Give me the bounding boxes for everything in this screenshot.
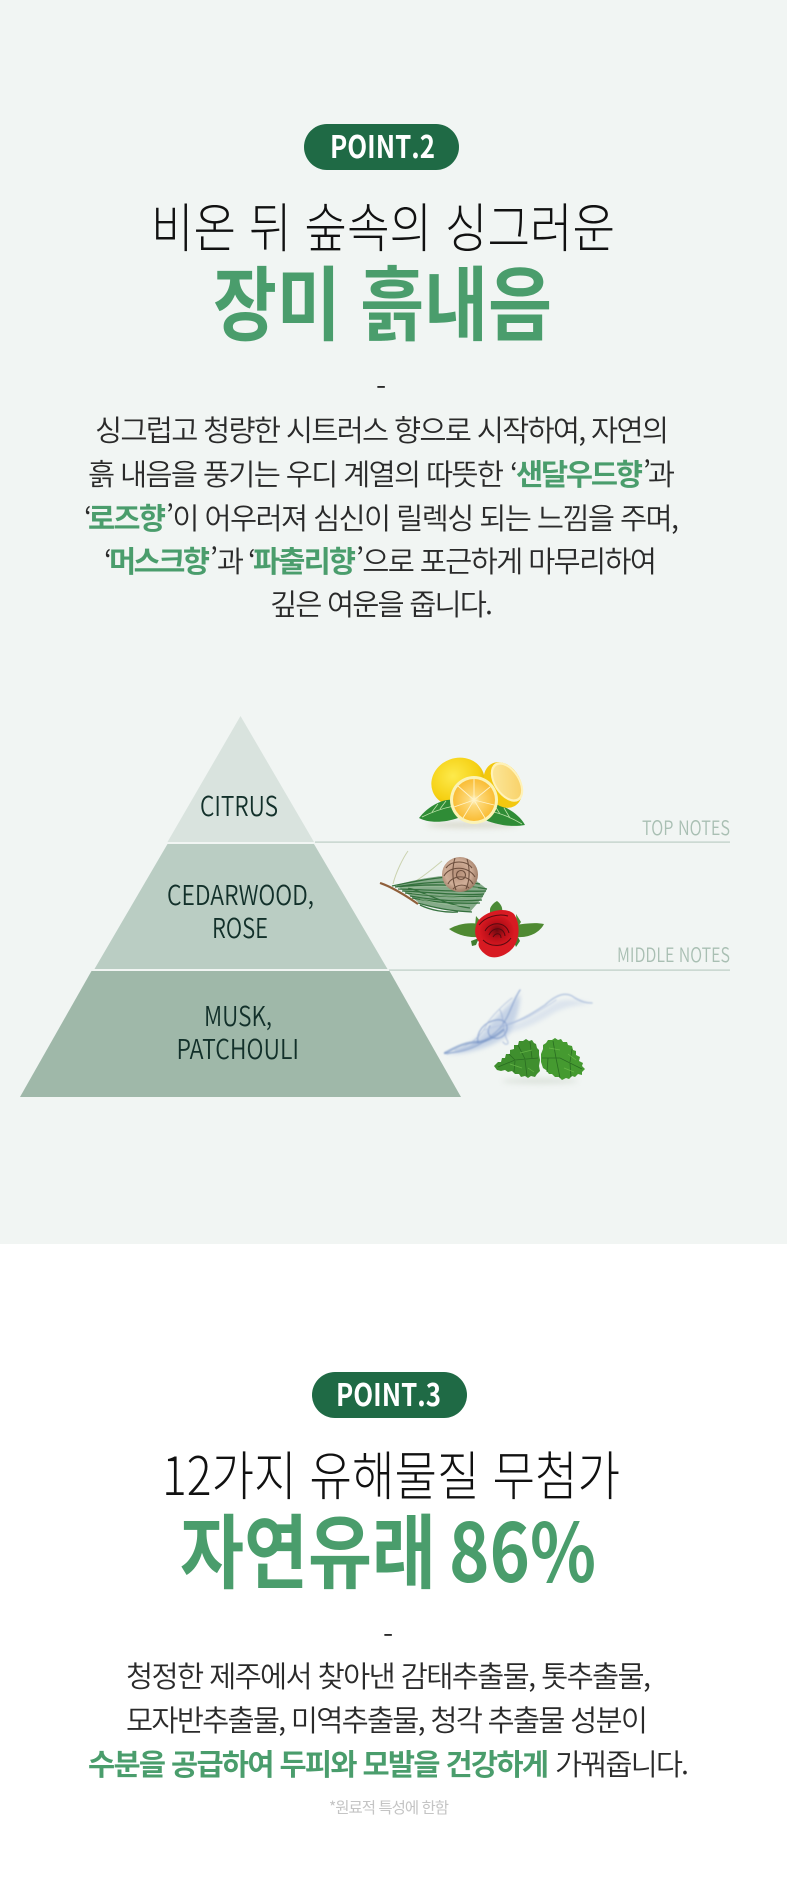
text block: point 3 description: 모자반추출물, 미역추출물, 청각 추출물 성분이 [126, 1698, 648, 1740]
pyramid tier: citrus: CITRUS [200, 785, 278, 824]
heading: point 3 title: 자연유래 [180, 1489, 436, 1606]
label: top notes with rule: TOP NOTES [642, 812, 730, 841]
text block: point 2 description: ‘ [84, 496, 92, 538]
text block: point 2 description: ‘ [104, 539, 112, 581]
pyramid tier: musk, patchouli: PATCHOULI [176, 1028, 299, 1067]
text block: point 2 description: 싱그럽고 청량한 시트러스 향으로 시작하여, 자연의 [95, 408, 669, 450]
panel: point 2 background [0, 0, 787, 1244]
icon: lemons and leaves [419, 750, 530, 828]
heading: point 3 subtitle: 12가지 유해물질 무첨가 [162, 1435, 620, 1511]
text block: point 2 description: ‘ [248, 539, 256, 581]
heading: point 3 title: 86% [449, 1489, 596, 1606]
text block: point 2 description: 파출리향 [253, 539, 356, 581]
badge: POINT.3: POINT.3 [336, 1370, 441, 1415]
footnote: *원료적 특성에 한함 [329, 1796, 449, 1818]
icon: patchouli leaves [494, 1038, 585, 1084]
text block: point 2 description: ‘ [510, 452, 518, 494]
text block: point 2 description [84, 408, 679, 624]
text block: point 2 description: ’으로 포근하게 마무리하여 [356, 539, 657, 581]
pyramid tier: musk, patchouli [20, 971, 461, 1097]
text: point 3 dash: - [383, 1613, 393, 1655]
chart: fragrance note pyramid [20, 716, 461, 1097]
icon: musk smoke [445, 990, 592, 1054]
text block: point 3 description: 수분을 공급하여 두피와 모발을 건강하게 [88, 1742, 549, 1784]
icon: cedar branch and cone [380, 851, 487, 912]
pyramid tier: musk, patchouli: MUSK, [204, 995, 272, 1034]
heading: point 2 subtitle: 비온 뒤 숲속의 싱그러운 [151, 187, 615, 263]
pyramid tier: cedarwood, rose: ROSE [212, 907, 268, 946]
text block: point 3 description [88, 1654, 689, 1784]
text block: point 2 description: 깊은 여운을 줍니다. [270, 582, 493, 624]
text block: point 3 description: 가꿔줍니다. [555, 1742, 689, 1784]
text block: point 3 description: 청정한 제주에서 찾아낸 감태추출물, 톳추출물, [126, 1654, 651, 1696]
label: middle notes with rule: MIDDLE NOTES [617, 939, 730, 968]
pyramid tier: cedarwood, rose: CEDARWOOD, [167, 874, 314, 913]
heading: point 2 title: 장미 흙내음 [213, 241, 552, 358]
text block: point 2 description: ’과 [643, 452, 675, 494]
text block: point 2 description: 흙 내음을 풍기는 우디 계열의 따뜻한 [88, 452, 504, 494]
text block: point 2 description: 샌달우드향 [516, 452, 643, 494]
text block: point 2 description: ’이 어우러져 심신이 릴렉싱 되는 느낌을 주며, [166, 496, 679, 538]
pyramid tier: cedarwood, rose [94, 844, 388, 969]
pyramid tier: citrus [168, 716, 314, 842]
text block: point 2 description: 머스크향 [109, 539, 210, 581]
icon: red rose [449, 901, 544, 957]
text block: point 2 description: 로즈향 [88, 496, 166, 538]
badge: POINT.2: POINT.2 [330, 122, 435, 167]
panel: point 3 background [0, 1244, 787, 1893]
text: point 2 dash: - [376, 365, 386, 407]
text block: point 2 description: ’과 [210, 539, 244, 581]
